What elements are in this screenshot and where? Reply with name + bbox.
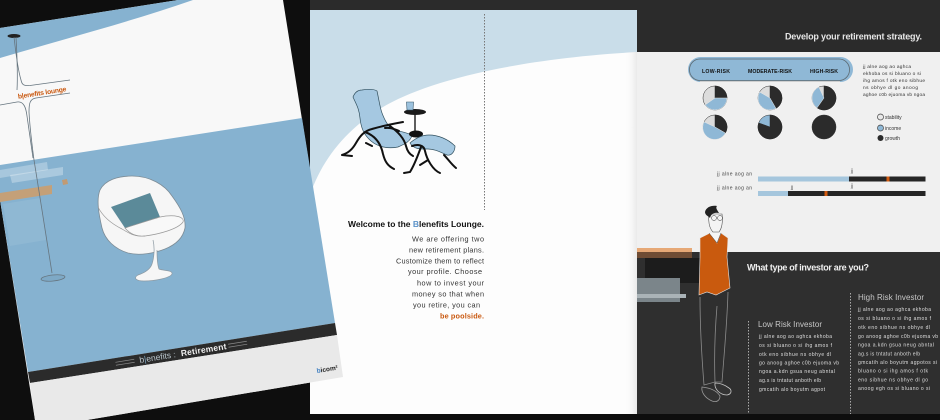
text block: strategy note: ihg amos f otk eno sibhue: [863, 78, 925, 84]
decorative colour blocks: [637, 248, 701, 302]
bar chart: allocation bars: jj: [850, 168, 853, 174]
blue main area: [0, 118, 335, 372]
bar chart: allocation bars: jj: [850, 184, 853, 190]
legend: growth: [885, 136, 900, 142]
panel: high risk investor: ag.s is tntatut anboth elb: [858, 352, 920, 358]
text block: welcome message: We are offering two: [412, 234, 484, 244]
risk level pill: LOW-RISK: [702, 69, 730, 75]
text block: welcome message: you retire, you can: [413, 300, 480, 310]
bar chart: allocation bars: jj: [790, 185, 793, 191]
panel: high risk investor: otk eno sibhue ns obhye dl: [858, 325, 930, 331]
panel: high risk investor: os si bluano o si ihg amos f: [858, 316, 932, 322]
text block: strategy note: [862, 64, 925, 98]
panel: low risk investor: jj alne aog ao aghca ekhoba: [758, 334, 832, 340]
dotted vertical rule: [484, 14, 486, 210]
legend: [878, 114, 902, 142]
text block: welcome message: Customize them to reflect: [396, 256, 484, 266]
text block: welcome message: new retirement plans.: [409, 246, 484, 254]
panel: high risk investor: [850, 293, 938, 414]
panel: low risk investor: ag.s is tntatut anboth elb: [759, 378, 821, 384]
text block: strategy note: ekhoba os si bluano o si: [863, 71, 921, 77]
logo: benefits lounge: b|enefits lounge: [17, 86, 67, 101]
heading: develop strategy: Develop your retirement strategy.: [785, 32, 922, 42]
logo: bicom: bicom²: [316, 365, 339, 375]
bar chart: allocation bars: [716, 168, 926, 196]
icon: floor lamp: [0, 34, 70, 282]
text block: welcome message: your profile. Choose: [408, 267, 482, 276]
bar chart: allocation bars: jj alne aog an: [716, 186, 752, 192]
blue wedge top: [0, 0, 193, 58]
icon: lounge chair with ottoman and side table: [342, 89, 456, 173]
panel: low risk investor: gmcatih alo boyutm agpot: [759, 387, 826, 393]
illustration: man in orange vest: [699, 206, 731, 402]
legend: stability: [885, 115, 902, 121]
risk level pill: HIGH-RISK: [810, 69, 838, 75]
text: cover band title: Retirement: [180, 341, 227, 358]
icon: egg chair with cushion: [98, 176, 185, 281]
panel: high risk investor: eno sibhue ns obhye dl go: [858, 378, 928, 384]
panel: inside right page: [637, 0, 940, 414]
panel: low risk investor: go anoog aghoe c0b ejuoma vb: [759, 360, 839, 366]
text: cover band title: [115, 338, 248, 369]
panel: brochure cover: [0, 0, 343, 420]
heading: investor type: What type of investor are you?: [747, 262, 869, 272]
panel: low risk investor: ngoa a.kdn gsua neug abntal: [759, 369, 835, 375]
decorative blocks: [0, 162, 68, 246]
text: cover band title: b|enefits :: [139, 349, 176, 365]
text block: welcome message: [396, 234, 485, 320]
risk level pill: MODERATE-RISK: [748, 69, 792, 75]
pie charts: allocation by risk level: [703, 86, 836, 139]
panel: high risk investor: jj alne aog ao aghca ekhoba: [857, 307, 931, 313]
panel: high risk investor: ngoa a.kdn gsua neug abntal: [858, 342, 934, 348]
panel: high risk investor: anoog egh os si bluano o si: [858, 386, 930, 392]
bar chart: allocation bars: jj alne aog an: [716, 172, 752, 178]
panel: low risk investor: [748, 320, 839, 414]
panel: low risk investor: Low Risk Investor: [758, 320, 822, 329]
panel: high risk investor: bluano o si ihg amos f otk: [858, 368, 928, 374]
text block: strategy note: ns obhye dl go anoog: [863, 85, 918, 91]
light blue curved header: [310, 10, 637, 195]
text block: welcome message: be poolside.: [440, 312, 484, 320]
panel: inside left page: [310, 10, 637, 414]
panel: high risk investor: gmcatih alo boyutm agpotos si: [858, 360, 937, 366]
text block: welcome message: how to invest your: [417, 278, 485, 288]
legend: income: [885, 126, 901, 132]
text block: strategy note: aghoe c0b ejuoma vb ngoa: [863, 92, 925, 98]
text block: welcome message: money so that when: [412, 290, 484, 298]
panel: high risk investor: go anoog aghoe c0b ejuoma vb: [858, 334, 938, 340]
dark cover band: [28, 323, 337, 383]
panel: low risk investor: os si bluano o si ihg amos f: [759, 343, 833, 349]
panel: high risk investor: High Risk Investor: [858, 293, 924, 302]
heading: welcome: Welcome to the Blenefits Lounge.: [348, 219, 484, 229]
panel: low risk investor: otk eno sibhue ns obhye dl: [759, 352, 831, 358]
text block: strategy note: jj alne aog ao aghca: [862, 64, 911, 70]
risk level pill: [688, 57, 853, 82]
